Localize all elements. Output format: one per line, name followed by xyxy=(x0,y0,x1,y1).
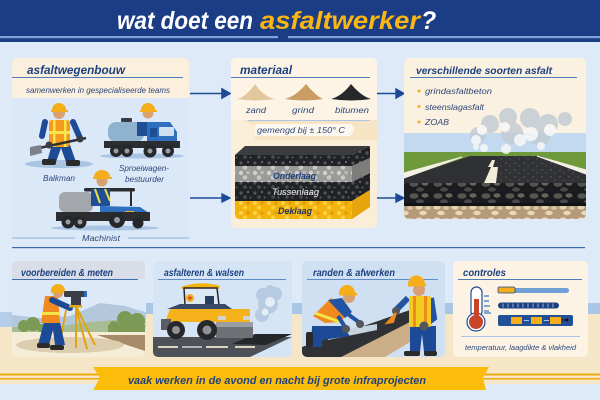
callout: gemengd: gemengd bij ± 150° C xyxy=(257,125,346,135)
chart: asfaltlagen xyxy=(235,146,370,219)
callout: gemengd xyxy=(248,120,370,136)
icon: weg onder wals xyxy=(153,337,292,357)
header band xyxy=(0,0,600,42)
icon: weg xyxy=(404,156,586,219)
icon: grind xyxy=(285,84,323,100)
icon: werker gehurkt xyxy=(306,285,364,347)
arrow: materiaal naar soorten onder xyxy=(377,194,404,202)
panel: randen en afwerken xyxy=(302,261,445,357)
label: onderlaag: Onderlaag xyxy=(273,171,316,181)
panel: voorbereiden en meten xyxy=(12,261,145,357)
title: wat doet een xyxy=(117,7,253,35)
list: soorten: steenslagasfalt xyxy=(425,102,485,112)
panel: verschillende soorten asfalt xyxy=(404,58,586,219)
subheading: samenwerken in gespecialiseerde teams xyxy=(26,86,170,95)
list: soorten: grindasfaltbeton xyxy=(425,86,492,96)
icon: wals xyxy=(161,283,253,340)
icon: sproeiwagen xyxy=(100,103,184,158)
label: machinist: Machinist xyxy=(82,234,121,243)
panel: controles xyxy=(453,261,588,357)
arrow: team naar materiaal onder xyxy=(190,194,230,202)
icon: vlakheidsbalk xyxy=(498,315,573,326)
title: asfaltwerker xyxy=(260,7,421,35)
label: sproeiwagenbestuurder: Sproeiwagen- xyxy=(119,164,169,173)
label: deklaag: Deklaag xyxy=(278,206,312,216)
icon: thermometer xyxy=(467,287,491,331)
heading: asfalteren & walsen xyxy=(164,268,244,279)
heading: controles xyxy=(463,267,506,279)
icon: werker staand xyxy=(387,276,437,356)
title: ? xyxy=(421,7,436,35)
label: tussenlaag: Tussenlaag xyxy=(272,187,319,197)
label: zand: zand xyxy=(245,105,266,115)
banner text: vaak werken in de avond en nacht bij grote infraprojecten xyxy=(128,375,426,387)
label: sproeiwagenbestuurder: bestuurder xyxy=(125,175,164,184)
banner xyxy=(0,367,600,390)
icon: stoom xyxy=(255,285,282,322)
caption: temperatuur, laagdikte & vlakheid xyxy=(465,343,577,352)
label: grind: grind xyxy=(292,105,314,115)
panel: materiaal xyxy=(231,58,377,228)
label: bitumen: bitumen xyxy=(335,105,369,115)
icon: zand xyxy=(237,84,275,100)
icon: bitumen xyxy=(331,84,371,100)
heading: randen & afwerken xyxy=(313,268,395,279)
heading: voorbereiden & meten xyxy=(21,268,113,279)
list: soorten xyxy=(418,86,492,127)
arrow: team naar materiaal boven xyxy=(190,89,230,98)
heading: verschillende soorten asfalt xyxy=(416,66,553,77)
icon: asfaltrand xyxy=(302,310,410,357)
icon: machinist voertuig xyxy=(51,170,159,230)
label: balkman: Balkman xyxy=(43,174,76,183)
panel: asfalteren en walsen xyxy=(153,261,292,357)
panel: asfaltwegenbouw xyxy=(12,58,189,238)
icon: landmeter xyxy=(37,284,95,350)
list: soorten: ZOAB xyxy=(424,117,449,127)
background landscape band xyxy=(0,303,600,384)
icon: stoom xyxy=(470,108,572,154)
icon: balkman xyxy=(25,103,93,168)
heading: asfaltwegenbouw xyxy=(27,63,126,77)
arrow: materiaal naar soorten boven xyxy=(377,89,404,98)
heading: materiaal xyxy=(240,63,293,77)
divider xyxy=(12,247,585,248)
icon: temperatuurbalk xyxy=(498,287,569,293)
icon: laagdiktebalk xyxy=(498,302,559,308)
